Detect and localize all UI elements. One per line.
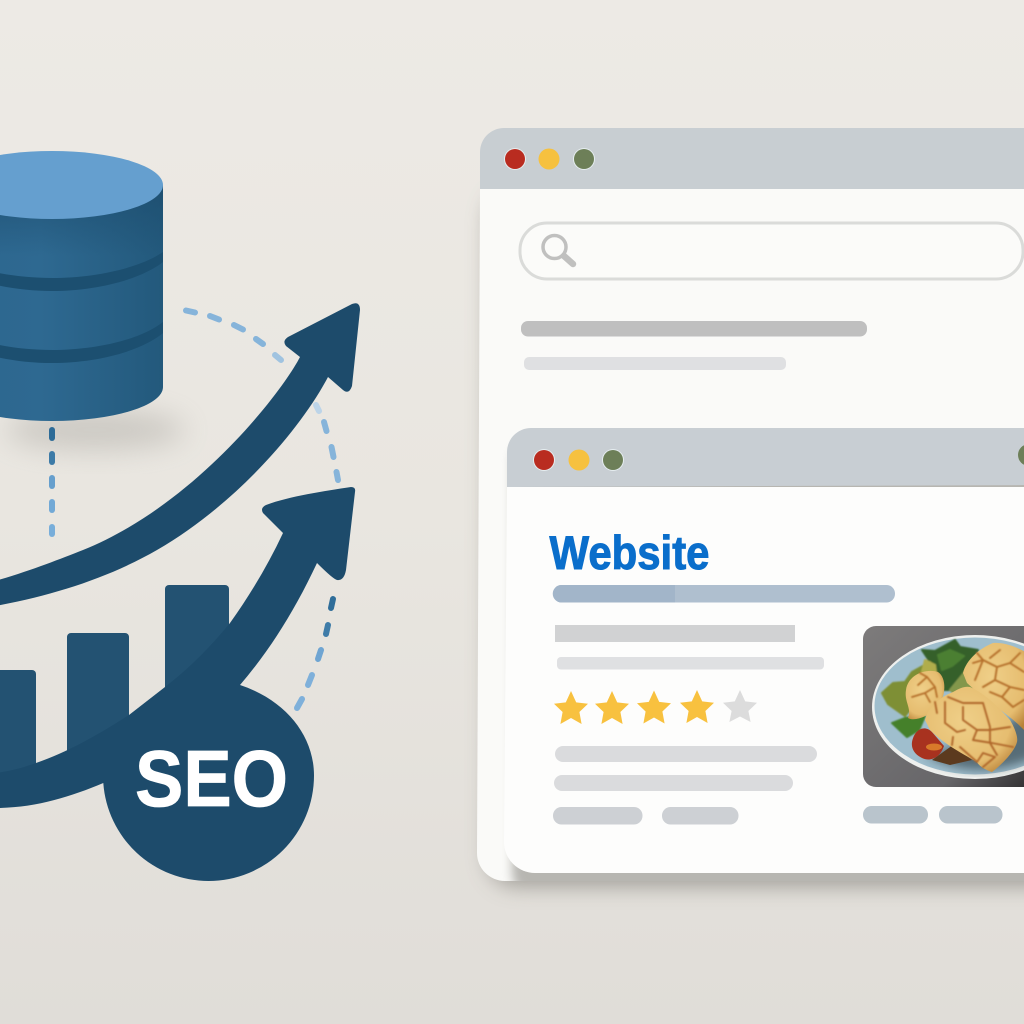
pill button two bbox=[939, 806, 1002, 824]
food photo bbox=[863, 626, 1024, 787]
back browser window bbox=[477, 128, 1024, 881]
text line: description two bbox=[554, 775, 793, 791]
upward arrow: top bbox=[0, 303, 360, 606]
URL bar bbox=[553, 585, 895, 602]
result subtitle bar bbox=[524, 357, 786, 370]
right chicken piece bbox=[963, 643, 1024, 730]
text line: description one bbox=[555, 746, 817, 762]
upward arrow with SEO badge bbox=[0, 487, 355, 881]
dashed arc: upper bbox=[186, 310, 338, 480]
arrow and circle badge bbox=[0, 487, 355, 881]
front window shadow on back window bbox=[512, 440, 1024, 895]
result title bar bbox=[521, 321, 867, 336]
dashed connector: database down bbox=[49, 430, 55, 534]
star rating bbox=[554, 690, 757, 724]
Website heading: Website bbox=[550, 526, 710, 579]
pill button one bbox=[863, 806, 928, 824]
database cylinder icon bbox=[0, 151, 185, 450]
text line: title bbox=[555, 625, 795, 642]
text line: snippet bbox=[557, 657, 824, 670]
window control dots bbox=[533, 444, 1024, 471]
pill tag two bbox=[662, 807, 738, 824]
back window drop shadow bbox=[488, 190, 1024, 886]
small chicken piece bbox=[906, 671, 944, 719]
search box bbox=[520, 223, 1023, 279]
SEO label: SEO bbox=[135, 734, 288, 823]
window title bar bbox=[507, 428, 1024, 487]
dashed arc: lower bbox=[297, 599, 333, 708]
large chicken piece bbox=[925, 687, 1017, 772]
tomato bbox=[912, 728, 972, 765]
bar chart bbox=[0, 585, 229, 790]
lettuce bbox=[882, 640, 982, 737]
front browser window bbox=[504, 428, 1024, 873]
window control dots bbox=[504, 148, 595, 170]
window title bar bbox=[480, 128, 1024, 189]
icon: magnifying glass bbox=[543, 236, 573, 264]
pill tag one bbox=[553, 807, 642, 824]
plate bbox=[872, 635, 1024, 779]
